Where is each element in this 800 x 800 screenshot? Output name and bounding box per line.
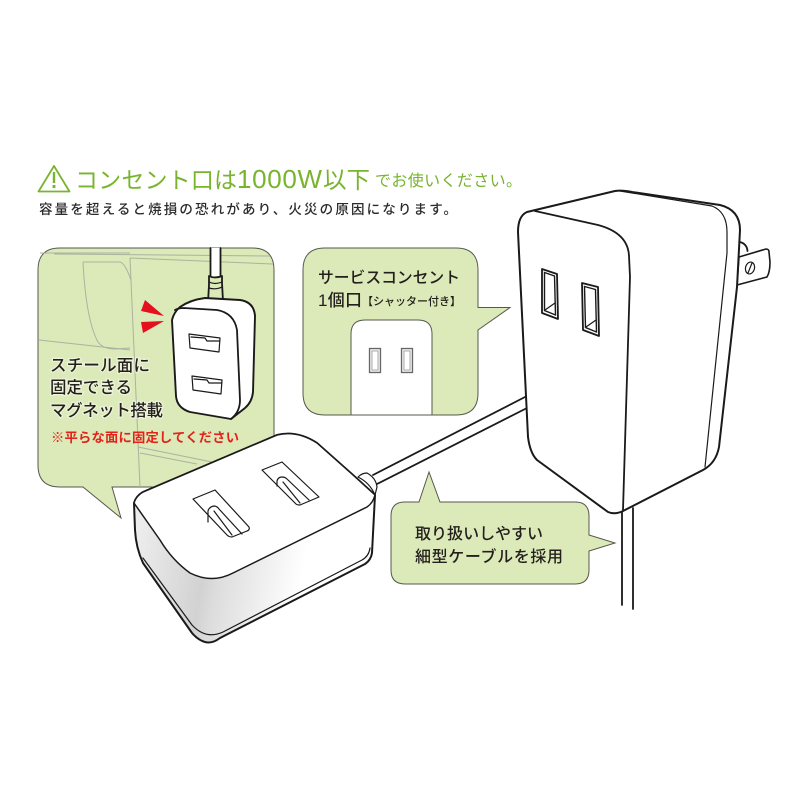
warning heading: 以下: [323, 167, 370, 193]
adapter body: [518, 191, 740, 513]
callout text: 【シャッター付き】: [362, 295, 461, 308]
callout bubble: [391, 472, 615, 584]
red note: ※平らな面に固定してください: [51, 430, 239, 445]
strip top face: [134, 434, 375, 578]
adapter front face edge: [535, 211, 630, 510]
warning heading: でお使いください。: [375, 172, 522, 190]
adapter socket 1: [542, 269, 558, 319]
callout text: [415, 525, 563, 566]
callout bubble: [303, 248, 510, 415]
heading text: コンセント口は: [75, 167, 237, 193]
panel: cable callout: [391, 472, 615, 584]
icon: warning triangle: [38, 166, 70, 192]
icon: small magnet plug body: [172, 298, 255, 419]
callout text: 細型ケーブルを採用: [415, 547, 563, 566]
adapter socket 2: [582, 283, 599, 336]
panel: magnet callout: [38, 248, 274, 518]
strip socket 2: [262, 462, 319, 505]
callout text: マグネット搭載: [50, 401, 163, 420]
cable between block and adapter: [373, 397, 527, 484]
icon: small magnet plug cord: [208, 248, 223, 303]
icon: red arrows: [141, 300, 164, 333]
callout text: 1個口: [318, 291, 362, 310]
callout text: 固定できる: [50, 378, 132, 397]
strip cord collar: [358, 473, 377, 495]
callout text: サービスコンセント: [318, 269, 460, 287]
callout text: 取り扱いしやすい: [415, 525, 543, 543]
strip socket 1: [193, 490, 249, 537]
adapter cable down: [622, 508, 633, 609]
callout text: [318, 269, 461, 310]
warning subtext: 容量を超えると焼損の恐れがあり、火災の原因になります。: [39, 201, 457, 217]
background sketch of steel surface: [39, 253, 273, 487]
callout text: [50, 357, 163, 420]
power strip block: [134, 434, 377, 642]
adapter side seam: [620, 191, 727, 467]
wall adapter: [518, 191, 770, 609]
callout bubble: [38, 248, 274, 518]
adapter rear prong: [740, 242, 748, 251]
strip body: [134, 434, 375, 642]
outlet illustration: [351, 320, 432, 415]
adapter prong: [737, 249, 770, 285]
warning heading: 1000W: [237, 164, 322, 194]
warning heading: [38, 164, 522, 194]
panel: service outlet callout: [303, 248, 510, 415]
strip bottom lip: [143, 548, 370, 635]
callout text: スチール面に: [50, 357, 150, 375]
